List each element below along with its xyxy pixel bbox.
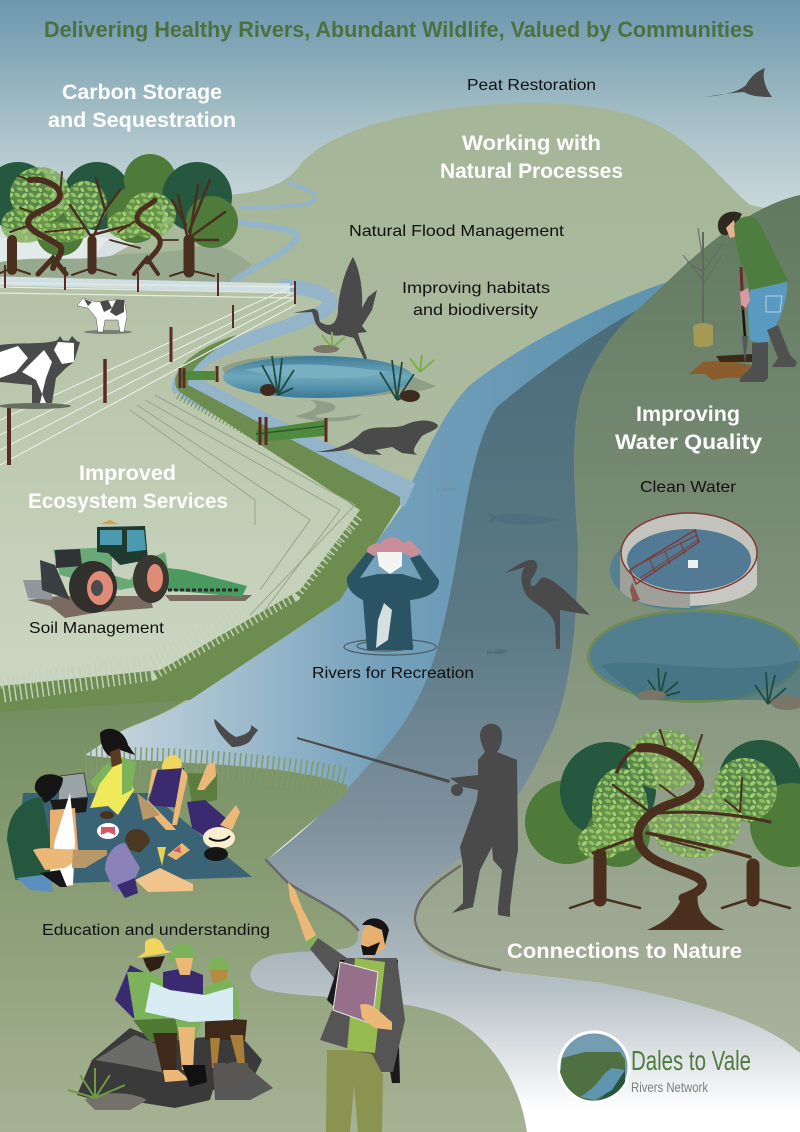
right bank land	[417, 195, 800, 1053]
education group on rock	[68, 938, 273, 1110]
hand	[740, 288, 750, 308]
sapling	[683, 228, 723, 326]
middle hiker	[163, 943, 207, 1087]
trousers	[326, 1050, 383, 1132]
boots	[740, 342, 768, 382]
hills and upper land	[0, 103, 800, 760]
planter with sapling	[683, 212, 797, 382]
head	[361, 924, 388, 958]
heading: improved ecosystem services: Ecosystem Services	[28, 490, 228, 513]
icon: fish leaping	[214, 719, 258, 747]
heading: carbon storage: Carbon Storage	[62, 81, 222, 104]
map	[145, 982, 233, 1022]
logo	[559, 1032, 751, 1102]
heading: carbon storage: and Sequestration	[48, 109, 236, 132]
icon: angler	[297, 724, 518, 917]
left farm field	[0, 278, 410, 710]
title: Delivering Healthy Rivers, Abundant Wildlife, Valued by Communities	[44, 17, 754, 42]
icon: flying heron	[293, 257, 377, 361]
hair	[718, 212, 742, 235]
pond with reeds	[222, 332, 436, 421]
green shirt	[347, 958, 385, 1053]
dark river channel	[230, 310, 800, 1132]
plant	[68, 1068, 125, 1098]
spade	[741, 267, 743, 310]
tree trunks	[570, 730, 790, 930]
logo badge	[559, 1032, 629, 1102]
label: improving habitats: Improving habitats	[402, 280, 550, 297]
rock	[77, 1028, 262, 1108]
label: improving habitats: and biodiversity	[413, 302, 538, 319]
tree foliage	[1, 167, 176, 243]
folder	[333, 962, 378, 1024]
label: soil management: Soil Management	[29, 620, 165, 637]
logo subtitle: Rivers Network	[631, 1079, 709, 1095]
river fish	[436, 488, 557, 655]
label: rivers for recreation: Rivers for Recreation	[312, 665, 474, 682]
man in green and child in white	[7, 774, 107, 892]
label: improving habitats	[402, 280, 550, 319]
trees: connections to nature	[525, 730, 800, 930]
river main blue band	[75, 282, 667, 900]
icon: large cow	[0, 336, 80, 409]
jacket	[320, 958, 405, 1072]
water treatment tank	[610, 513, 757, 610]
heading: working with natural processes	[440, 132, 623, 183]
heading: working with natural processes: Working with	[462, 132, 601, 155]
heading: connections to nature: Connections to Nature	[507, 940, 742, 963]
icon: standing heron	[505, 560, 590, 649]
stream winding to river	[0, 182, 410, 495]
leaky dams	[180, 366, 326, 445]
tree crowns	[0, 154, 238, 256]
grassy river bank	[0, 335, 400, 782]
footpath edges	[266, 860, 500, 970]
plates	[97, 823, 190, 860]
heading: improved ecosystem services	[28, 462, 228, 513]
heading: working with natural processes: Natural Processes	[440, 160, 623, 183]
picnic family	[7, 729, 252, 898]
head	[726, 220, 737, 238]
label: peat restoration: Peat Restoration	[467, 77, 596, 94]
left hiker	[115, 938, 190, 1082]
heading: improving water quality	[615, 403, 762, 454]
icon: otter	[315, 420, 438, 455]
woman in yellow	[90, 729, 136, 819]
label: education and understanding: Education and understanding	[42, 922, 270, 939]
distant field hill	[0, 245, 252, 282]
label: clean water: Clean Water	[640, 479, 737, 496]
tree crowns	[525, 740, 800, 867]
soil mound	[689, 360, 753, 380]
heading: carbon storage	[48, 81, 236, 132]
swimmer	[344, 537, 439, 655]
guide holding folder	[288, 882, 405, 1132]
grey tablet	[58, 773, 88, 800]
blonde woman	[137, 755, 217, 830]
hand on folder	[360, 1004, 392, 1030]
clean water pond	[587, 609, 800, 710]
heading: improved ecosystem services: Improved	[79, 462, 176, 485]
heading: improving water quality: Improving	[636, 403, 740, 426]
bottom left land	[0, 690, 527, 1132]
icon: small cow	[77, 298, 132, 334]
pale haze behind trees	[0, 238, 108, 262]
child	[105, 829, 193, 898]
tree foliage	[578, 730, 777, 860]
sky background	[0, 0, 800, 300]
logo wordmark: Dales to Vale	[631, 1045, 751, 1076]
trees: top row	[0, 154, 238, 276]
reeds	[262, 356, 414, 400]
blanket	[15, 793, 252, 883]
lying woman	[187, 800, 240, 861]
heading: improving water quality: Water Quality	[615, 431, 762, 454]
jacket	[734, 216, 788, 292]
right hiker	[203, 958, 250, 1084]
backpack	[327, 960, 400, 1083]
white base at foot of page	[0, 1000, 800, 1132]
tree trunks	[0, 172, 225, 276]
raised arm	[288, 882, 316, 942]
icon: curlew in flight	[705, 68, 772, 97]
fence	[0, 265, 355, 615]
jeans	[748, 282, 787, 345]
label: natural flood management: Natural Flood Management	[349, 223, 565, 240]
tractor	[23, 520, 252, 618]
